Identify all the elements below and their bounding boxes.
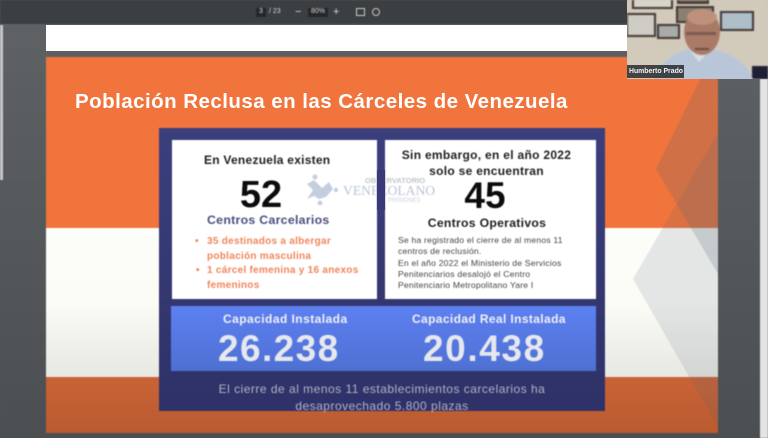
slide xyxy=(46,57,718,433)
framed pictures xyxy=(627,0,753,38)
lower orange band xyxy=(46,377,718,433)
panel: navy container xyxy=(159,128,605,411)
body text: Penitenciarios desalojó el Centro xyxy=(398,269,530,279)
icon: logo mark xyxy=(307,174,338,206)
bullet list xyxy=(194,236,359,291)
middle white band xyxy=(46,228,718,377)
decorative chevrons xyxy=(633,79,718,426)
head xyxy=(684,9,720,55)
icon: rotate xyxy=(372,8,380,16)
heading: En Venezuela existen xyxy=(204,153,330,167)
stat: real installed capacity: Capacidad Real Instalada xyxy=(412,312,566,326)
footer note xyxy=(219,382,546,413)
panel: total centers xyxy=(172,140,377,299)
page counter: 3 xyxy=(259,8,263,15)
footer note: desaprovechado 5.800 plazas xyxy=(295,399,469,413)
stat: installed capacity: Capacidad Instalada xyxy=(223,312,348,326)
heading xyxy=(402,148,572,178)
zoom controls: + xyxy=(333,6,339,18)
watermark logo: VENEZOLANO xyxy=(343,183,435,198)
icon: fit page xyxy=(356,8,365,16)
zoom controls: 80% xyxy=(311,8,325,15)
stat: installed capacity: 26.238 xyxy=(218,328,340,369)
bullet list: femeninos xyxy=(207,280,260,291)
body text: centros de reclusión. xyxy=(398,246,482,256)
subheading: Centros Carcelarios xyxy=(207,213,330,227)
mouth xyxy=(695,48,709,50)
body text: En el año 2022 el Ministerio de Servicios xyxy=(398,258,561,268)
webcam: speaker xyxy=(627,0,768,79)
zoom controls: − xyxy=(295,6,301,18)
number 52: 52 xyxy=(240,174,282,216)
bullet list: población masculina xyxy=(207,251,311,262)
panel: operating centers xyxy=(385,140,596,299)
bullet list: • xyxy=(195,236,199,247)
number 45: 45 xyxy=(464,175,506,216)
bullet list: 35 destinados a albergar xyxy=(207,236,331,247)
page counter xyxy=(256,7,281,17)
stat: installed capacity xyxy=(218,312,348,369)
body text: Penitenciario Metropolitano Yare I xyxy=(398,280,533,290)
watermark logo: PRISIONES xyxy=(388,198,421,204)
panel: capacity bar xyxy=(171,306,596,371)
body text: Se ha registrado el cierre de al menos 11 xyxy=(398,235,563,245)
pdf toolbar xyxy=(0,0,768,24)
name tag xyxy=(627,65,684,78)
body text xyxy=(398,235,563,290)
name tag: Humberto Prado xyxy=(629,68,683,75)
dark chair xyxy=(752,66,768,79)
shirt xyxy=(653,49,753,79)
zoom controls xyxy=(295,6,340,18)
stat: real installed capacity: 20.438 xyxy=(423,328,546,369)
watermark text: OBSERVATORIO xyxy=(365,176,425,185)
glasses xyxy=(686,32,716,35)
stat: real installed capacity xyxy=(412,312,566,369)
previous page sliver xyxy=(46,25,718,51)
footer note: El cierre de al menos 11 establecimientos carcelarios ha xyxy=(219,382,545,396)
watermark logo xyxy=(307,174,435,206)
heading: Sin embargo, en el año 2022 xyxy=(402,148,571,162)
title: Población Reclusa en las Cárceles de Venezuela xyxy=(75,90,568,113)
bullet list: • xyxy=(196,265,200,276)
bullet list: 1 cárcel femenina y 16 anexos xyxy=(207,265,359,276)
subheading: Centros Operativos xyxy=(428,216,546,230)
heading: solo se encuentran xyxy=(429,164,544,178)
page counter: / 23 xyxy=(269,8,281,15)
navy divider between cards xyxy=(377,170,385,210)
